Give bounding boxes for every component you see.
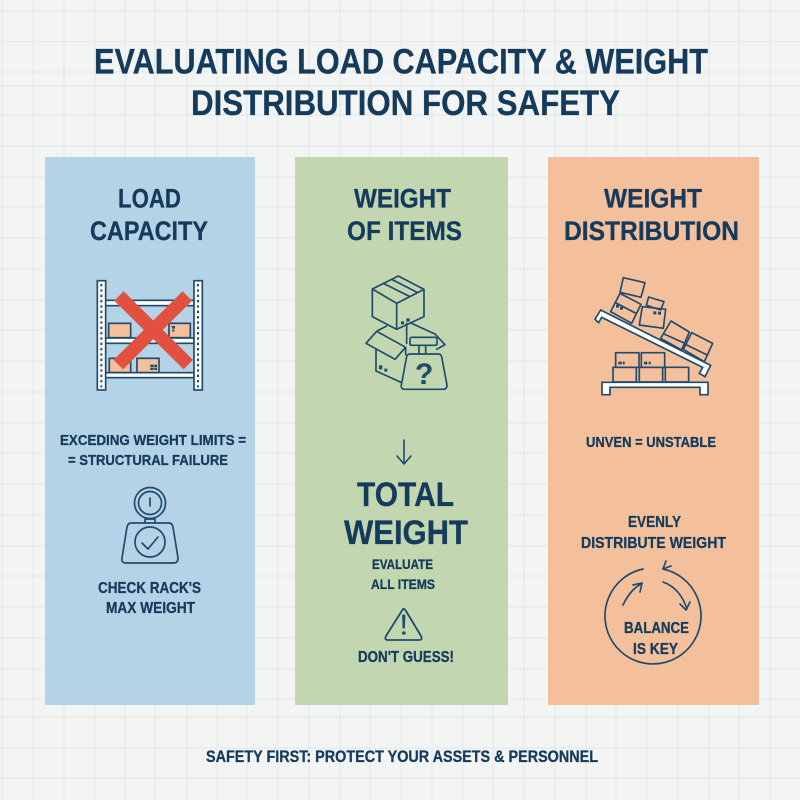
icon: overloaded rack with red cross xyxy=(97,281,202,390)
heading: weight distribution: DISTRIBUTION xyxy=(564,216,739,246)
icon: warning triangle xyxy=(385,609,422,640)
text: exceeding weight limits xyxy=(60,432,246,469)
heading: weight distribution: WEIGHT xyxy=(604,184,702,214)
text: evaluate all items xyxy=(371,556,435,592)
heading: load capacity xyxy=(90,184,208,246)
panel: load capacity xyxy=(45,157,255,705)
text: evaluate all items: EVALUATE xyxy=(372,556,433,572)
text: check rack's max weight: MAX WEIGHT xyxy=(106,600,195,617)
heading: weight distribution xyxy=(564,184,739,246)
text: exceeding weight limits: = STRUCTURAL FAILURE xyxy=(68,452,228,469)
title xyxy=(94,42,708,123)
icon: boxes and unknown weight: ? xyxy=(415,358,433,391)
text: evenly distribute weight: DISTRIBUTE WEIGHT xyxy=(581,535,726,552)
text: evenly distribute weight: EVENLY xyxy=(628,514,681,531)
heading: load capacity: LOAD xyxy=(118,184,181,214)
text: don't guess: DON'T GUESS! xyxy=(358,649,454,666)
text: exceeding weight limits: EXCEDING WEIGHT LIMITS = xyxy=(60,432,246,449)
text: total weight xyxy=(344,476,468,552)
text: balance is key: IS KEY xyxy=(633,641,678,658)
heading: weight of items xyxy=(347,184,462,246)
icon: balance cycle xyxy=(605,561,701,664)
text: uneven unstable: UNVEN = UNSTABLE xyxy=(586,434,716,451)
heading: weight of items: OF ITEMS xyxy=(347,216,462,246)
heading: weight of items: WEIGHT xyxy=(354,184,451,214)
panel: weight of items xyxy=(295,157,508,705)
title: EVALUATING LOAD CAPACITY & WEIGHT xyxy=(94,42,708,82)
footer: SAFETY FIRST: PROTECT YOUR ASSETS & PERSONNEL xyxy=(206,748,598,766)
text: check rack's max weight xyxy=(98,580,201,617)
arrow: down xyxy=(397,440,411,464)
panel: weight distribution xyxy=(548,157,759,705)
text: balance is key xyxy=(624,620,689,658)
text: balance is key: BALANCE xyxy=(624,620,689,637)
icon: scale with check xyxy=(122,488,178,563)
text: total weight: WEIGHT xyxy=(344,514,468,552)
heading: load capacity: CAPACITY xyxy=(90,216,208,246)
icon: boxes and unknown weight xyxy=(366,276,447,391)
text: check rack's max weight: CHECK RACK'S xyxy=(98,580,201,597)
text: evenly distribute weight xyxy=(581,514,726,552)
icon: tilted and level pallets xyxy=(595,278,713,395)
title: DISTRIBUTION FOR SAFETY xyxy=(191,83,620,123)
text: evaluate all items: ALL ITEMS xyxy=(371,576,435,592)
text: total weight: TOTAL xyxy=(357,476,454,514)
